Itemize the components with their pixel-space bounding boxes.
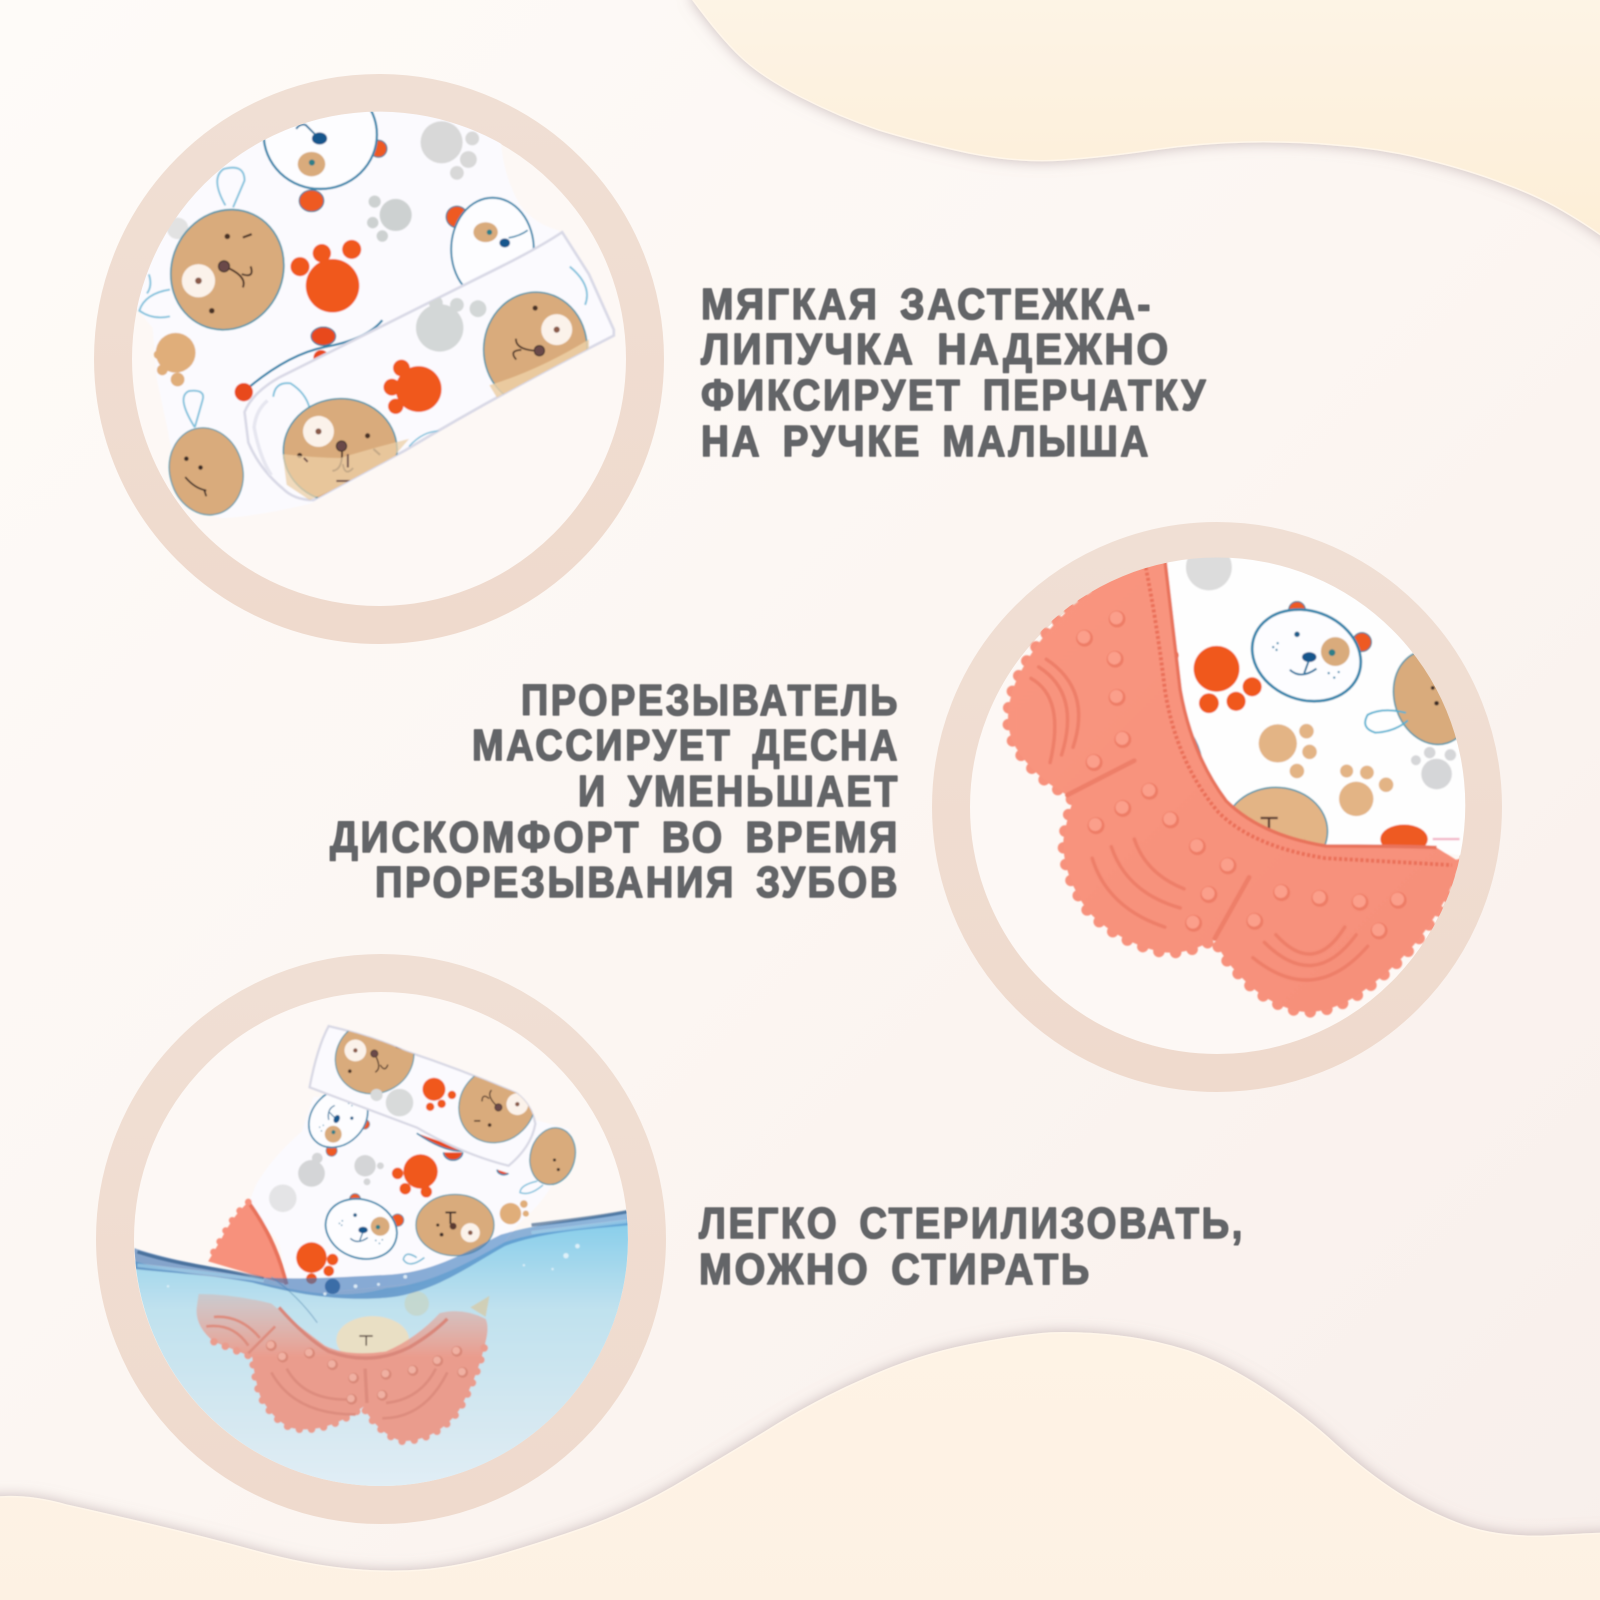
text block: velcro closure: МЯГКАЯ ЗАСТЕЖКА- xyxy=(701,280,1153,329)
water xyxy=(136,1220,628,1486)
bear top: white xyxy=(262,112,388,213)
panel: teether circle xyxy=(951,541,1484,1073)
silicone teether xyxy=(1008,560,1460,1012)
decorative cream wave top right xyxy=(693,0,1600,250)
text block: teether massages gums: ПРОРЕЗЫВАТЕЛЬ xyxy=(521,676,900,725)
photo: silicone teether closeup xyxy=(1008,544,1484,1012)
decorative cream wave bottom xyxy=(0,1333,1600,1600)
circle ring xyxy=(113,93,645,625)
text block: teether massages gums: ДИСКОМФОРТ ВО ВРЕМЯ xyxy=(330,813,900,862)
teether under the water xyxy=(197,1294,488,1441)
text block: easy to sterilise: ЛЕГКО СТЕРИЛИЗОВАТЬ, xyxy=(699,1199,1245,1248)
panel: sterilising circle xyxy=(115,973,647,1514)
text block: teether massages gums xyxy=(330,676,900,907)
text block: easy to sterilise xyxy=(699,1199,1245,1294)
teether above the water xyxy=(208,1202,287,1284)
text block: teether massages gums: И УМЕНЬШАЕТ xyxy=(578,767,900,816)
text block: teether massages gums: ПРОРЕЗЫВАНИЯ ЗУБОВ xyxy=(375,858,900,907)
bear left: tan xyxy=(169,208,286,332)
photo: mitten in water xyxy=(134,1024,628,1486)
text block: velcro closure: НА РУЧКЕ МАЛЫША xyxy=(701,417,1151,466)
text block: easy to sterilise: МОЖНО СТИРАТЬ xyxy=(699,1245,1092,1294)
water surface xyxy=(134,1210,631,1299)
panel: velcro closure circle xyxy=(113,80,645,625)
bear right: white xyxy=(446,198,534,301)
circle ring xyxy=(951,541,1483,1073)
photo: mitten with velcro strap xyxy=(137,112,616,517)
text block: velcro closure: ЛИПУЧКА НАДЕЖНО xyxy=(701,325,1171,374)
velcro strap xyxy=(310,1026,535,1166)
text block: velcro closure: ФИКСИРУЕТ ПЕРЧАТКУ xyxy=(701,371,1208,420)
text block: velcro closure xyxy=(701,280,1208,466)
velcro strap xyxy=(245,232,614,500)
tan bear on mitten xyxy=(416,1194,494,1256)
circle ring xyxy=(115,973,647,1505)
text block: teether massages gums: МАССИРУЕТ ДЕСНА xyxy=(472,721,900,770)
